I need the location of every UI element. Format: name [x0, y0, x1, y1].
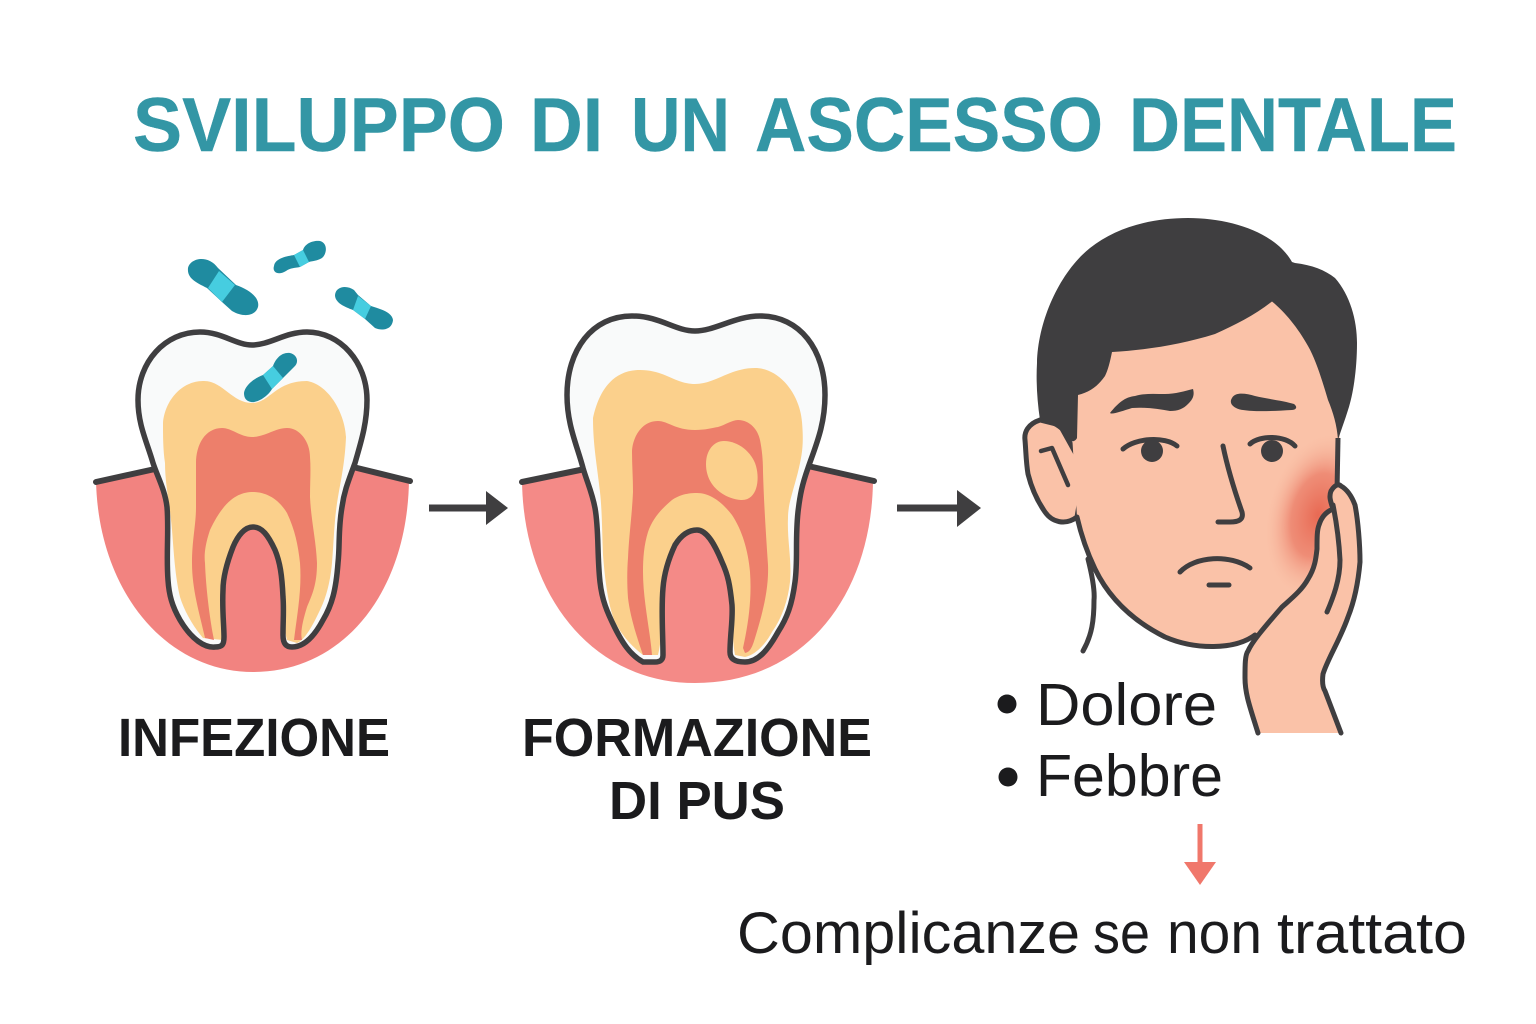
title: DENTALE [1129, 83, 1457, 168]
label: infezione: INFEZIONE [118, 708, 390, 768]
cheek redness [1274, 448, 1335, 582]
tooth crown and roots [138, 332, 367, 647]
arrow: down to complications [1184, 824, 1216, 885]
gum [522, 466, 874, 683]
hand [1245, 485, 1360, 733]
ear inner [1041, 448, 1068, 485]
complications text: Complicanze [737, 901, 1080, 966]
title: DI [530, 83, 603, 168]
panel: pus tooth [522, 316, 874, 683]
complications text: se [1093, 901, 1150, 966]
icon: bacteria [188, 241, 393, 402]
panel: infection tooth [96, 332, 410, 672]
arrow: infection to pus [429, 491, 508, 525]
title: UN [631, 83, 730, 168]
arrow: pus to symptoms [897, 490, 981, 527]
illustration: man with toothache [1025, 218, 1389, 733]
label: formazione di pus [522, 708, 872, 831]
hair [1037, 218, 1357, 441]
dentin [593, 368, 803, 657]
label: formazione di pus: DI PUS [609, 771, 785, 831]
dentin [163, 381, 346, 643]
jaw line [1077, 517, 1255, 647]
complications text [737, 901, 1467, 966]
pulp [192, 428, 317, 640]
eyes [1123, 437, 1295, 462]
face [1070, 295, 1340, 645]
face side line [1337, 438, 1338, 492]
gum [96, 467, 410, 672]
tooth crown and roots [567, 316, 825, 662]
tooth outline [138, 332, 367, 647]
title [133, 83, 1457, 168]
hand outline [1245, 485, 1360, 733]
neck line [1083, 559, 1094, 651]
complications text: non [1167, 901, 1262, 966]
pulp [627, 420, 768, 655]
complications text: trattato [1277, 901, 1467, 966]
title: ASCESSO [755, 83, 1103, 168]
eyebrows [1110, 389, 1296, 414]
nose [1218, 446, 1242, 522]
symptom list: Dolore [1036, 672, 1217, 738]
symptom list [998, 672, 1223, 809]
label: formazione di pus: FORMAZIONE [522, 708, 872, 768]
title: SVILUPPO [133, 83, 505, 168]
finger line [1327, 505, 1340, 612]
mouth [1180, 559, 1250, 572]
ear [1025, 420, 1085, 522]
symptom list: Febbre [1036, 743, 1223, 809]
tooth outline [567, 316, 825, 662]
pus pocket [706, 441, 758, 500]
